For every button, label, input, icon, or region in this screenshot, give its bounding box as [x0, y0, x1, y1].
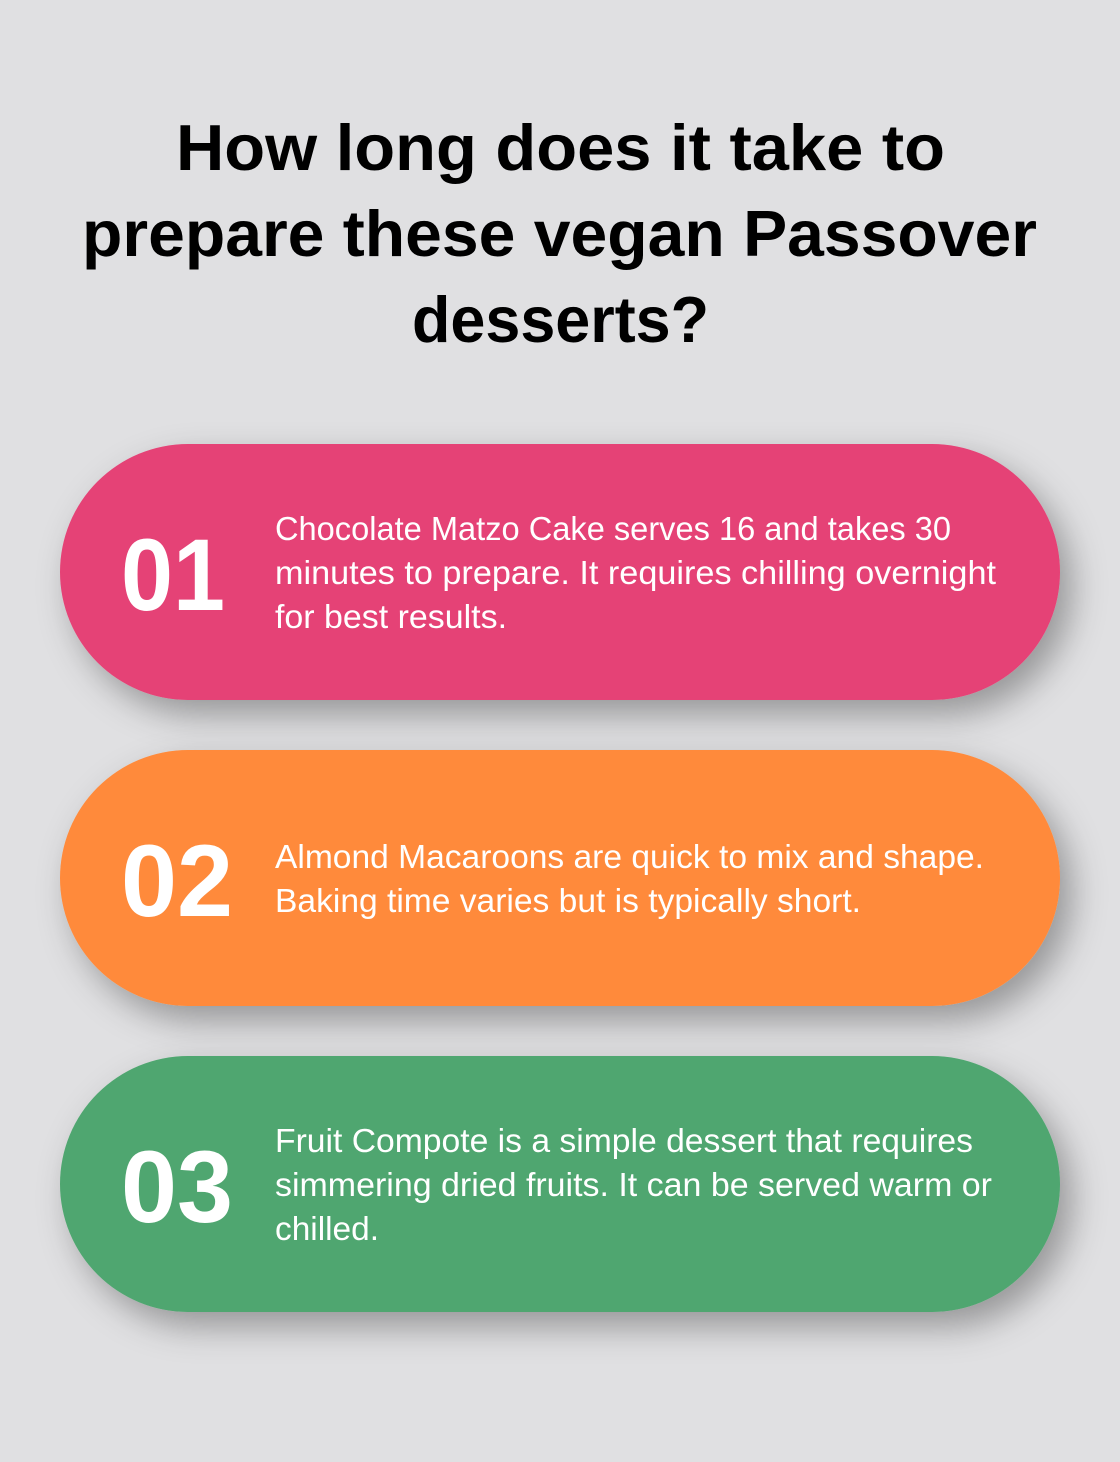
text block: step 01 description: [275, 510, 996, 635]
text block: step 03 description: chilled.: [275, 1210, 379, 1247]
text block: step 03 description: [275, 1122, 992, 1247]
text block: step 02 description: [275, 838, 984, 919]
orange pill background: [60, 750, 1060, 1006]
text block: step 03 description: simmering dried fruits. It can be served warm or: [275, 1166, 992, 1203]
title: prepare these vegan Passover: [82, 197, 1037, 270]
text block: step 02 description: Baking time varies but is typically short.: [275, 882, 861, 919]
green pill background: [60, 1056, 1060, 1312]
pink pill background: [60, 444, 1060, 700]
number 02: 02: [121, 824, 233, 938]
text block: step 02 description: Almond Macaroons are quick to mix and shape.: [275, 838, 984, 875]
number 01: 01: [121, 518, 225, 632]
number 03: 03: [121, 1130, 233, 1244]
title: [82, 111, 1037, 356]
panel: step 02 almond macaroons: [60, 750, 1060, 1006]
title: desserts?: [412, 283, 709, 356]
text block: step 01 description: minutes to prepare. It requires chilling overnight: [275, 554, 996, 591]
text block: step 03 description: Fruit Compote is a simple dessert that requires: [275, 1122, 973, 1159]
text block: step 01 description: for best results.: [275, 598, 507, 635]
panel: step 01 chocolate matzo cake: [60, 444, 1060, 700]
panel: step 03 fruit compote: [60, 1056, 1060, 1312]
title: How long does it take to: [176, 111, 945, 184]
text block: step 01 description: Chocolate Matzo Cake serves 16 and takes 30: [275, 510, 951, 547]
